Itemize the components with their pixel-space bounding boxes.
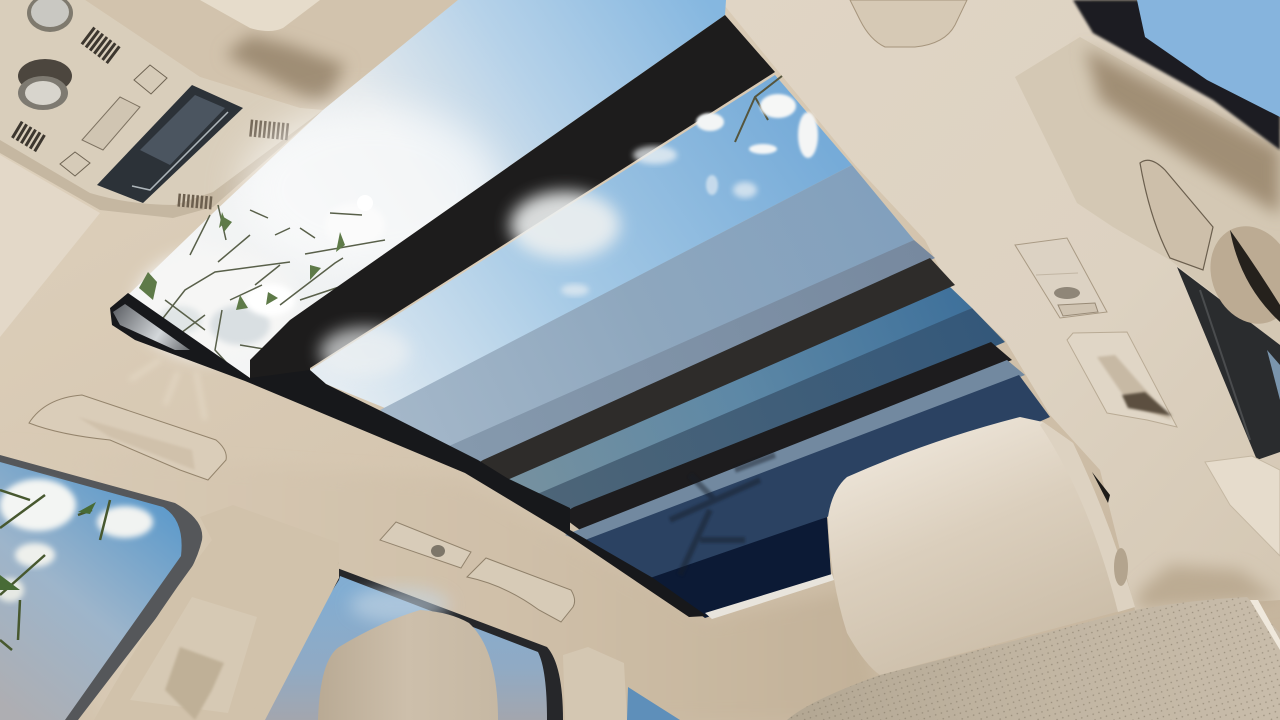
tinted band 4: [535, 308, 1005, 525]
glass rim highlight: [705, 574, 834, 619]
chrome corner: [113, 304, 190, 350]
pillar trim panel: [130, 597, 257, 720]
front glass sky: [310, 75, 852, 408]
right grab handle: [1067, 332, 1177, 427]
front glass blossom: [696, 76, 818, 158]
tinted band 2: [440, 240, 935, 470]
right headliner panel: [720, 0, 1280, 610]
C pillar: [563, 647, 627, 720]
right side window: [1177, 267, 1280, 460]
sunroof dark frame: [110, 293, 707, 617]
rear quarter glass: [627, 687, 680, 720]
overhead console: [0, 0, 323, 218]
rear grab handle: [467, 558, 575, 622]
left window: [0, 455, 202, 720]
tinted band 3: [495, 285, 972, 510]
reading light: [27, 0, 73, 32]
left headliner panel: [0, 155, 100, 337]
upper left headliner above console: [85, 0, 458, 110]
tinted band 7: [650, 517, 831, 618]
cloud glow: [240, 105, 500, 275]
coat hook recess: [1140, 160, 1280, 336]
buttons: [134, 65, 167, 94]
dark strip 2: [560, 342, 1012, 530]
tree reflection: [670, 455, 775, 575]
B pillar right edge: [248, 562, 339, 720]
upper right grab handle: [850, 0, 967, 47]
blossom branch: [135, 195, 385, 372]
centre window: [250, 562, 563, 720]
black roller bar: [250, 15, 775, 382]
right switch panel: [1015, 238, 1107, 318]
control knob: [18, 59, 72, 93]
tinted band 6: [585, 375, 1050, 585]
rear switch panel: [380, 522, 471, 568]
sky through rear glass: [128, 0, 726, 378]
console display: [97, 85, 243, 203]
tinted band 1: [380, 165, 914, 460]
lower headliner shading: [0, 450, 880, 720]
left grab handle: [29, 395, 226, 480]
lower right trim: [1205, 456, 1280, 556]
rear seat headrest: [318, 610, 498, 720]
vents: [87, 35, 116, 57]
B pillar: [94, 505, 339, 720]
dark notch: [1092, 472, 1110, 503]
front seat back: [787, 597, 1280, 720]
front headrest: [828, 417, 1135, 675]
front glass clouds: [320, 146, 757, 377]
tinted band 5: [565, 360, 1025, 545]
dark strip 1: [464, 258, 955, 480]
top right window: [1073, 0, 1280, 150]
left light rays: [130, 360, 205, 420]
